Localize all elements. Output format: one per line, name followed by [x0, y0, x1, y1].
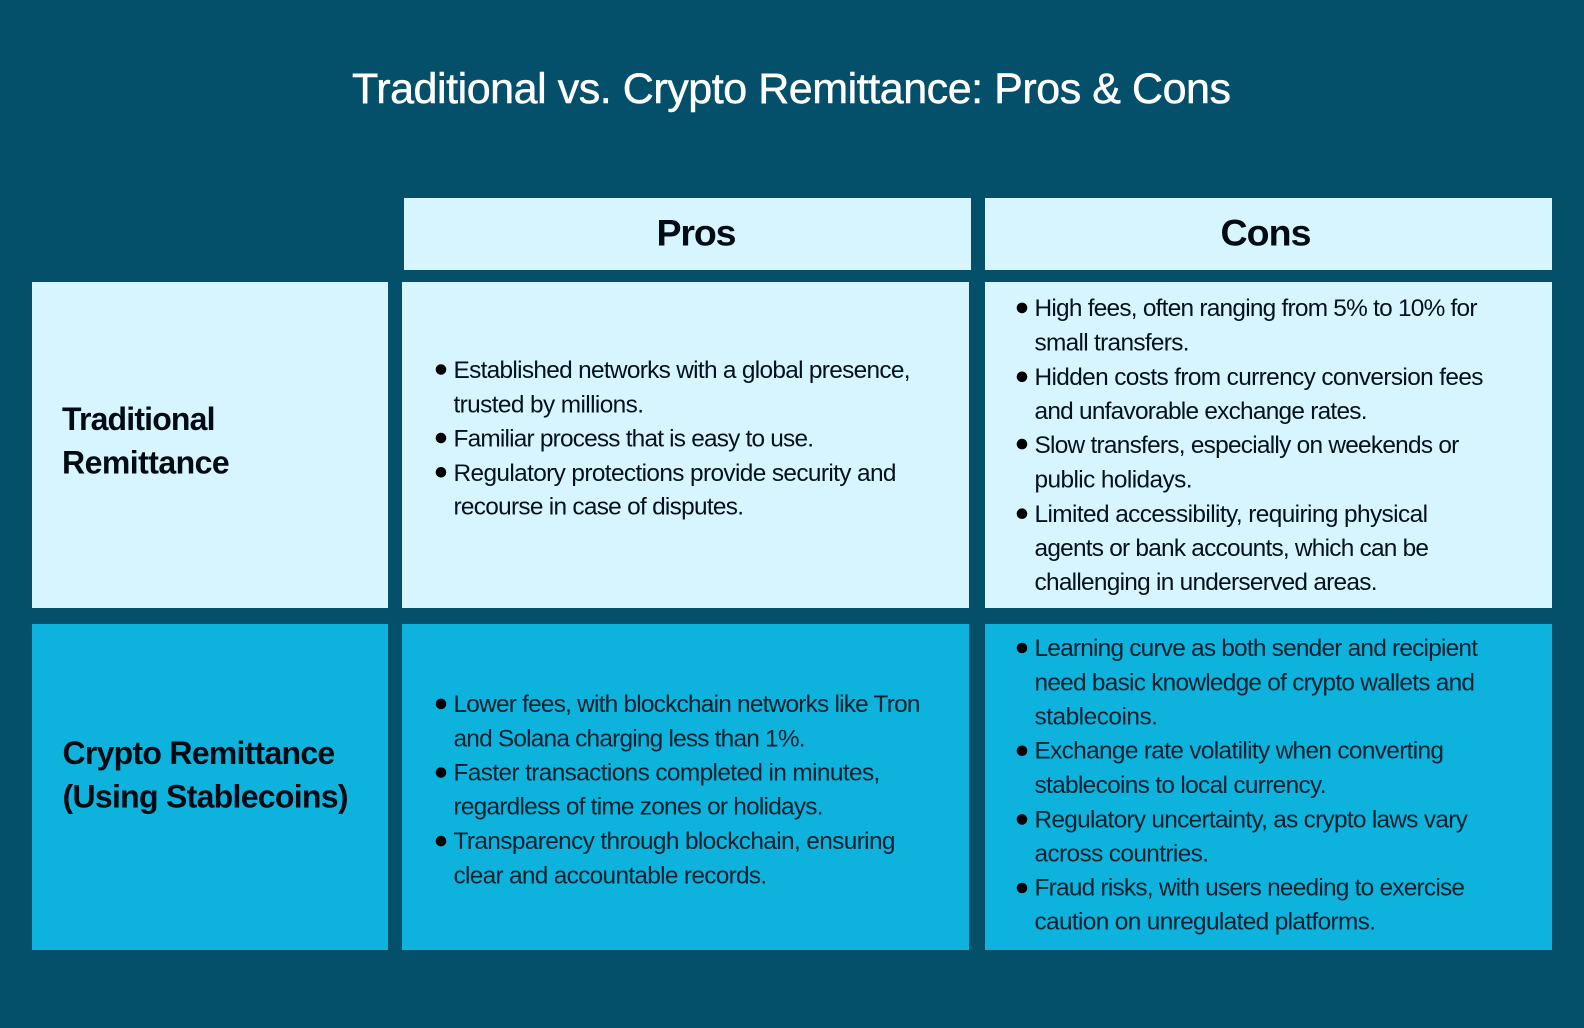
row header: crypto remittance: (Using Stablecoins)	[62, 779, 348, 815]
row header: traditional remittance	[32, 282, 388, 608]
panel: traditional cons: High fees, often ranging from 5% to 10% for	[1034, 295, 1478, 322]
row header: traditional remittance: Traditional	[62, 401, 216, 437]
panel: traditional cons: Hidden costs from currency conversion fees	[1034, 364, 1484, 391]
panel: crypto pros: regardless of time zones or holidays.	[454, 794, 824, 820]
row header: crypto remittance	[32, 624, 388, 950]
panel: crypto pros: Lower fees, with blockchain networks like Tron	[454, 691, 920, 718]
panel: crypto pros: clear and accountable records.	[454, 862, 767, 889]
panel: traditional pros: Established networks with a global presence,	[454, 357, 910, 384]
panel: traditional cons: agents or bank accounts, which can be	[1034, 535, 1429, 562]
panel: crypto cons: stablecoins to local currency.	[1034, 772, 1326, 799]
column header: cons	[985, 198, 1552, 270]
panel: traditional pros: trusted by millions.	[454, 392, 644, 418]
panel: crypto cons: Exchange rate volatility when converting	[1034, 738, 1444, 764]
panel: traditional cons: challenging in underserved areas.	[1034, 569, 1378, 596]
panel: crypto pros	[402, 624, 969, 950]
panel: traditional cons: and unfavorable exchange rates.	[1034, 398, 1368, 425]
panel: crypto cons: caution on unregulated platforms.	[1034, 908, 1376, 936]
title: Traditional vs. Crypto Remittance: Pros & Cons	[352, 65, 1231, 113]
panel: traditional pros	[402, 282, 969, 608]
panel: crypto pros: Transparency through blockchain, ensuring	[454, 828, 896, 855]
column header: cons: Cons	[1220, 212, 1312, 254]
panel: traditional cons: small transfers.	[1034, 330, 1190, 356]
panel: traditional cons: public holidays.	[1034, 466, 1192, 494]
row header: crypto remittance: Crypto Remittance	[62, 735, 335, 771]
panel: crypto pros: and Solana charging less than 1%.	[454, 726, 806, 752]
column header: pros	[404, 198, 971, 270]
panel: traditional pros: recourse in case of disputes.	[454, 494, 744, 520]
panel: crypto cons: need basic knowledge of crypto wallets and	[1034, 670, 1475, 696]
panel: traditional cons: Slow transfers, especially on weekends or	[1034, 432, 1459, 459]
panel: traditional cons	[985, 282, 1552, 608]
panel: crypto cons: Fraud risks, with users needing to exercise	[1034, 874, 1465, 902]
panel: crypto cons: Regulatory uncertainty, as crypto laws vary	[1034, 806, 1469, 833]
panel: crypto pros: Faster transactions completed in minutes,	[454, 760, 880, 786]
panel: traditional pros: Regulatory protections provide security and	[454, 460, 896, 487]
row header: traditional remittance: Remittance	[62, 444, 230, 480]
panel: traditional pros: Familiar process that is easy to use.	[454, 426, 814, 452]
panel: crypto cons: across countries.	[1034, 840, 1209, 868]
panel: crypto cons: Learning curve as both sender and recipient	[1034, 635, 1478, 662]
panel: crypto cons	[985, 624, 1552, 950]
column header: pros: Pros	[656, 212, 736, 254]
panel: traditional cons: Limited accessibility, requiring physical	[1034, 501, 1428, 528]
panel: crypto cons: stablecoins.	[1034, 704, 1158, 730]
